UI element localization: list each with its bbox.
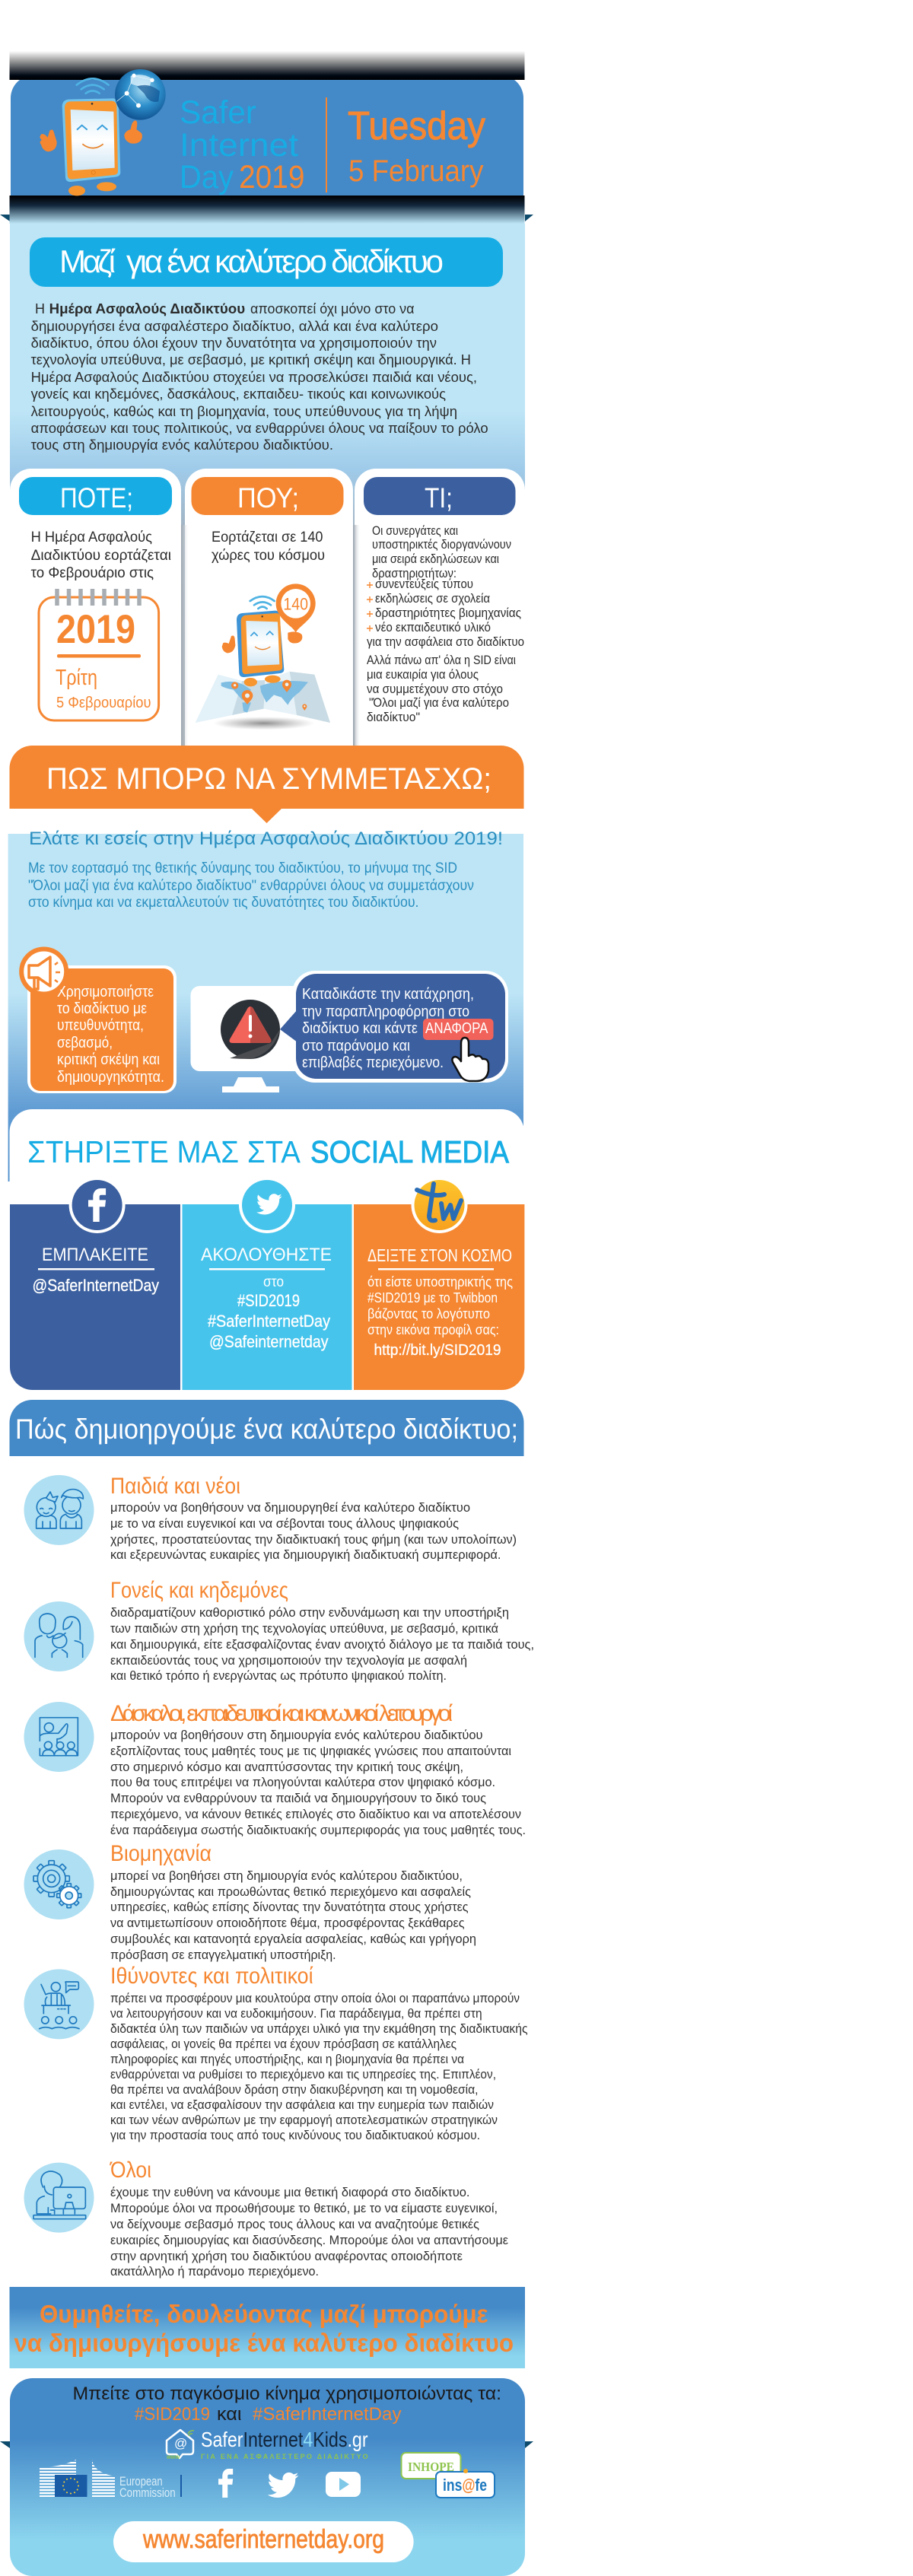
heading: support us on social media: SOCIAL MEDIA [310,1134,510,1169]
banner: how we create a better internet: Πώς δημιοηργούμε ένα καλύτερο διαδίκτυο; [15,1414,518,1445]
text: when description [31,530,171,581]
logo: Safer Internet Day 2019: Day [180,159,234,196]
text: participate description: "Όλοι μαζί για ένα καλύτερο διαδίκτυο" ενθαρρύνει όλους να συμμετάσχουν [28,878,474,894]
text: everyone: Μπορούμε όλοι να προωθήσουμε το θετικό, με το να είμαστε ευγενικοί, [110,2201,498,2215]
text: what description: διαδίκτυο" [367,711,420,724]
intro text block: Η [35,301,45,316]
callout: use the internet responsibly: υπευθυνότητα, [57,1017,144,1034]
text: what description: να συμμετέχουν στο στόχο [367,682,503,696]
heading: ΠΟΤΕ: ΠΟΤΕ; [60,482,133,514]
logo: SaferInternet4Kids: www [166,2454,180,2460]
icon: gears [24,1849,94,1919]
panel: twitter [183,1177,352,1390]
heading: industry: Βιομηχανία [110,1841,212,1866]
icon: parents [24,1601,94,1671]
panel: twibbon: στην εικόνα προφίλ σας: [367,1321,499,1337]
text: what description: για την ασφάλεια στο διαδίκτυο [367,635,524,649]
text: industry: να αντιμετωπίσουν οποιοδήποτε θέμα, προσφέροντας ξεκάθαρες [110,1916,464,1930]
text: decision makers: ενθαρρύνεται να ρυθμίσει το περιεχόμενο και τις υπηρεσίες της. Επιπλέον, [110,2067,496,2081]
panel: footer [10,2378,525,2576]
header top black gradient bar backdrop and blue panel [9,51,525,196]
text: everyone: να δείχνουμε σεβασμό προς τους άλλους και να αναζητούμε θετικές [110,2217,479,2231]
icon: twibbon [411,1177,467,1233]
callout: report illegal content: διαδίκτυο και κάντε [302,1020,418,1037]
text: teachers: που θα τους επιτρέψει να πλοηγούνται καλύτερα στον ψηφιακό κόσμο. [110,1775,495,1789]
text: children [110,1500,517,1562]
text: parents: των παιδιών στη χρήση της τεχνολογίας υπεύθυνα, με σεβασμό, κριτικά [110,1621,498,1636]
panel: twibbon: http://bit.ly/SID2019 [374,1342,501,1359]
text: teachers: περιεχόμενο, να κάνουν θετικές επιλογές στο διαδίκτυο και να αποτελέσουν [110,1807,521,1821]
logo: INHOPE and insafe: INHOPE [408,2460,454,2474]
text: decision makers: θα πρέπει να αναλάβουν δράση στην διακυβέρνηση και τη νομοθεσία, [110,2082,478,2097]
text: parents: εκπαιδεύοντάς τους να χρησιμοποιούν την τεχνολογία με ασφαλή [110,1653,467,1668]
intro text block: λειτουργούς, καθώς και τη βιομηχανία, τους υπεύθυνους για τη λήψη [31,404,457,419]
text: teachers [110,1728,526,1837]
text: decision makers: και εντέλει, να εξασφαλίσουν την ασφάλεια και την ευημερία των παιδιών [110,2097,494,2112]
text: what description: μια ευκαιρία για όλους [367,668,479,682]
logo: SaferInternet4Kids: SaferInternet4Kids.gr [201,2428,368,2451]
logo: European Commission: Commission [119,2485,176,2500]
item: industry [24,1841,476,1962]
panel: twitter: #SaferInternetDay [208,1312,330,1331]
callout: report illegal content: Καταδικάστε την κατάχρηση, [302,986,474,1003]
text: teachers: στο σημερινό κόσμο και αναπτύσσοντας την κριτική τους σκέψη, [110,1760,463,1774]
text: children: χρήστες, προστατεύοντας την διαδικτυακή τους φήμη (και των υπολοίπων) [110,1532,517,1547]
panel: twitter: #SID2019 [237,1291,300,1310]
text: everyone: στην αρνητική χρήση του διαδικτύου αναφέροντας οποιοδήποτε [110,2249,463,2263]
panel: twibbon: ότι είστε υποστηρικτής της [367,1274,513,1290]
icon: calendar 2019: Τρίτη [56,666,97,690]
text: industry: δημιουργώντας και προωθώντας θετικό περιεχόμενο και ασφαλείς [110,1884,471,1899]
banner: remember, working together: να δημιουργήσουμε ένα καλύτερο διαδίκτυο [14,2329,514,2357]
panel: facebook: ΕΜΠΛΑΚΕΙΤΕ [42,1245,148,1265]
ribbon triangles bottom [0,2441,533,2448]
text: industry: συμβουλές και κατανοητά εργαλεία ασφαλείας, καθώς και γρήγορη [110,1932,476,1946]
title pill [30,237,503,287]
panel: what [353,469,525,765]
header lower black gradient bar [9,196,525,224]
icon: mascot on map with 140 pin: 140 [283,595,308,614]
callout: report illegal content: την παραπληροφόρηση στο [302,1003,469,1020]
text: decision makers: διδακτέα ύλη των παιδιών να υπάρχει υλικό για την εκμάθηση της διαδικτυακής [110,2021,528,2036]
text: where description [212,530,325,564]
header date: Tuesday 5 February [326,97,485,192]
heading: ΠΟΥ [192,477,344,515]
banner: how can I participate [9,746,523,823]
text: decision makers: πληροφορίες και πηγές υποστήριξης, και η βιομηχανία θα πρέπει να [110,2052,464,2066]
callout: report illegal content: στο παράνομο και [302,1038,410,1054]
map pins [231,680,307,711]
text: teachers: μπορούν να βοηθήσουν στη δημιουργία ενός καλύτερου διαδικτύου [110,1728,482,1742]
panel: where [181,469,353,765]
heading: support us on social media [27,1134,510,1169]
text: everyone: έχουμε την ευθύνη να κάνουμε μια θετική διαφορά στο διαδίκτυο. [110,2185,470,2199]
heading: parents: Γονείς και κηδεμόνες [110,1578,288,1603]
logo: INHOPE and insafe [402,2453,495,2498]
icon: monitor with warning sign [190,986,304,1092]
intro text block: διαδίκτυο, όπου όλοι έχουν την δυνατότητα να χρησιμοποιούν την [31,336,437,351]
text: when description: Η Ημέρα Ασφαλούς [31,530,152,545]
text: what description: Αλλά πάνω απ' όλα η SID είναι [367,654,516,667]
text: everyone: ακατάλληλο ή παράνομο περιεχόμενο. [110,2264,319,2279]
callout: use the internet responsibly: δημιουργηκότητα. [57,1069,164,1086]
text: what description: δραστηριότητες βιομηχανίας [375,606,521,620]
heading: ΠΟΥ: ΠΟΥ; [237,482,299,514]
text: what description: εκδηλώσεις σε σχολεία [375,592,490,606]
text: industry: μπορεί να βοηθήσει στη δημιουργία ενός καλύτερου διαδικτύου, [110,1868,463,1883]
heading: participate invitation: Ελάτε κι εσείς στην Ημέρα Ασφαλούς Διαδικτύου 2019! [29,828,503,849]
panel: twibbon: ΔΕΙΞΤΕ ΣΤΟΝ ΚΟΣΜΟ [367,1245,512,1265]
text: join the global movement [73,2384,501,2425]
text: parents: και δημιουργικά, είτε εξασφαλίζοντας έναν ανοιχτό διάλογο με τα παιδιά τους, [110,1637,534,1652]
panel: social media white card [9,1109,524,1204]
logo: European Commission [40,2460,182,2500]
text: industry [110,1868,476,1962]
callout: use the internet responsibly: κριτική σκέψη και [57,1051,160,1068]
panel: facebook [10,1177,180,1390]
item: teachers and social workers [24,1701,526,1837]
callout: use the internet responsibly: το διαδίκτυο με [57,1000,147,1017]
icon: children [24,1475,94,1545]
header date: Tuesday 5 February: Tuesday [348,104,485,148]
text: what description: συνεντεύξεις τύπου [375,577,473,591]
callout: report illegal content [280,971,508,1083]
panel: participate background [8,834,523,1181]
callout: report illegal content: επιβλαβές περιεχόμενο. [302,1054,444,1071]
intro text block: αποφάσεων και τους πολιτικούς, να ενθαρρύνει όλους να παίξουν το ρόλο [31,421,488,436]
icon: speaker [24,1969,94,2039]
text: join the global movement: #SID2019 [135,2404,210,2425]
icon: teacher [24,1702,94,1772]
icon: calendar 2019: 2019 [56,607,135,652]
logo: SaferInternet4Kids: @ [174,2436,187,2450]
text: what description: μια σειρά εκδηλώσεων και [372,552,499,566]
text: children: και εξερευνώντας ευκαιρίες για δημιουργική διαδικτυακή συμπεριφορά. [110,1547,501,1562]
logo: Safer Internet Day 2019 [180,94,304,196]
heading: ΤΙ [364,477,516,515]
heading: teachers: Δάσκαλοι, εκπαιδευτικοί και κοινωνικοί λειτουργοί [110,1701,453,1726]
icon: calendar 2019 [39,589,159,720]
icon: mascot on map with 140 pin [196,584,330,730]
text: decision makers: πρέπει να προσφέρουν μια κουλτούρα στην οποία όλοι οι παραπάνω μπορούν [110,1991,520,2005]
text: participate description: Με τον εορτασμό της θετικής δύναμης του διαδικτύου, το μήνυμα της SID [28,860,457,876]
text: what description: "Όλοι μαζί για ένα καλύτερο [369,696,509,710]
button: website [113,2521,414,2562]
logo: SaferInternet4Kids [166,2428,368,2460]
panel: twitter: @Safeinternetday [209,1332,329,1351]
text: teachers: ένα παράδειγμα σωστής διαδικτυακής συμπεριφοράς για τους μαθητές τους. [110,1823,526,1837]
text: industry: υπηρεσίες, καθώς επίσης δίνοντας την δυνατότητα στους χρήστες [110,1900,469,1914]
panel: facebook: @SaferInternetDay [32,1276,159,1295]
text: join the global movement: Μπείτε στο παγκόσμιο κίνημα χρησιμοποιώντας τα: [73,2384,501,2404]
heading: ΤΙ: ΤΙ; [425,482,453,514]
text: teachers: εξοπλίζοντας τους μαθητές τους με τις ψηφιακές γνώσεις που απαιτούνται [110,1744,511,1758]
intro text block: Ημέρα Ασφαλούς Διαδικτύου στοχεύει να προσελκύσει παιδιά και νέους, [31,370,477,385]
heading: children: Παιδιά και νέοι [110,1474,240,1499]
text: join the global movement: #SaferInternetDay [253,2404,402,2425]
icon: facebook [69,1177,126,1233]
text: children: μπορούν να βοηθήσουν να δημιουργηθεί ένα καλύτερο διαδίκτυο [110,1500,470,1515]
heading: support us on social media: ΣΤΗΡΙΞΤΕ ΜΑΣ ΣΤΑ [27,1134,301,1169]
banner: how we create a better internet [9,1400,523,1456]
logo: Safer Internet Day 2019: Internet [180,127,298,164]
icon: mascot phone with globe [40,69,166,196]
icon: hand cursor [452,1038,488,1081]
intro panel background [10,224,525,746]
text: what description: Οι συνεργάτες και [372,524,458,538]
panel: twibbon: #SID2019 με το Twibbon [367,1290,498,1305]
logo: European Commission: European [119,2474,163,2489]
text: teachers: Μπορούν να ενθαρρύνουν τα παιδιά να δημιουργήσουν το δικό τους [110,1791,486,1805]
title pill: Μαζί [59,243,116,279]
text: where description: χώρες του κόσμου [212,548,325,564]
text: join the global movement: και [217,2404,242,2425]
heading: decision makers: Ιθύνοντες και πολιτικοί [110,1964,313,1989]
text: decision makers: να λειτουργήσουν και να ευδοκιμήσουν. Για παράδειγμα, θα πρέπει στη [110,2006,482,2021]
panel: twibbon [354,1177,524,1390]
text: everyone: ευκαιρίες δημιουργίας και διασύνδεσης. Μπορούμε όλοι να απαντήσουμε [110,2233,508,2247]
intro text block: γονείς και κηδεμόνες, δασκάλους, εκπαιδευ- τικούς και κοινωνικούς [31,386,446,402]
item: everyone [24,2158,508,2279]
panel: twibbon: βάζοντας το λογότυπο [367,1305,490,1321]
logo: INHOPE and insafe: ins@fe [443,2476,487,2495]
text: what description [367,524,524,724]
text: decision makers: και των νέων ανθρώπων με την εφαρμογή αποτελεσματικών στρατηγικών [110,2113,498,2127]
intro text block: Ημέρα Ασφαλούς Διαδικτύου [49,301,245,316]
item: parents and guardians [24,1578,534,1683]
text: parents: διαδραματίζουν καθοριστικό ρόλο στην ενδυνάμωση και την υποστήριξη [110,1605,509,1620]
intro text block: τεχνολογία υπεύθυνα, με σεβασμό, με κριτική σκέψη και δημιουργικά. Η [31,352,471,367]
icon: twitter [239,1177,295,1233]
text: where description: Εορτάζεται σε 140 [212,530,323,545]
banner: how can I participate: ΠΩΣ ΜΠΟΡΩ ΝΑ ΣΥΜΜΕΤΑΣΧΩ; [46,762,491,796]
callout: use the internet responsibly: σεβασμό, [57,1035,113,1051]
text: parents [110,1605,534,1683]
icon: person at computer [24,2163,94,2233]
intro text block: δημιουργήσει ένα ασφαλέστερο διαδίκτυο, αλλά και ένα καλύτερο [31,319,438,334]
text: everyone [110,2185,508,2279]
callout: use the internet responsibly: Χρησιμοποιήστε [57,984,154,1000]
intro text block: τους στη δημιουργία ενός καλύτερου διαδικτύου. [31,437,333,453]
text: what description: υποστηρικτές διοργανώνουν [372,538,511,552]
button: report: ΑΝΑΦΟΡΑ [425,1020,488,1037]
logo: Safer Internet Day 2019: Safer [180,94,256,131]
text: industry: πρόσβαση σε επαγγελματική υποστήριξη. [110,1948,336,1962]
intro text block: αποσκοπεί όχι μόνο στο να [250,301,414,316]
callout: use the internet responsibly [21,949,177,1093]
icon: calendar 2019: 5 Φεβρουαρίου [56,695,151,711]
heading: ΠΟΤΕ [19,477,172,515]
icon: megaphone [21,949,66,994]
text: participate description [28,860,474,911]
text: decision makers [110,1991,528,2142]
logo: Safer Internet Day 2019: 2019 [239,159,304,196]
text: when description: Διαδικτύου εορτάζεται [31,548,171,564]
banner: remember, working together [9,2287,525,2368]
text: children: με το να είναι ευγενικοί και να σέβονται τους άλλους ψηφιακούς [110,1516,459,1531]
text: what description: δραστηριοτήτων: [372,567,456,580]
icons: footer social media [218,2469,361,2498]
intro text block [31,301,488,453]
ribbon triangles top [0,215,533,221]
text: parents: και θετικό τρόπο ή ενεργώντας ως πρότυπο ψηφιακού πολίτη. [110,1668,447,1683]
logo: SaferInternet4Kids: ΓΙΑ ΕΝΑ ΑΣΦΑΛΕΣΤΕΡΟ ΔΙΑΔΙΚΤΥΟ [201,2453,368,2460]
item: decision makers and politicians [24,1964,528,2142]
panel: twitter: στο [263,1274,284,1290]
text: decision makers: ασφάλειας, οι γονείς θα πρέπει να έχουν πρόσβαση σε κατάλληλες [110,2037,456,2051]
heading: everyone: Όλοι [109,2158,151,2183]
text: what description: νέο εκπαιδευτικό υλικό [375,621,491,634]
panel: when [10,469,181,765]
text: when description: το Φεβρουάριο στις [31,565,154,581]
header date: Tuesday 5 February: 5 February [348,154,484,188]
text: participate description: στο κίνημα και να εκμεταλλευτούν τις δυνατότητες του διαδικτύου. [28,895,418,911]
title pill: για ένα καλύτερο διαδίκτυο [126,243,444,279]
panel: twitter: ΑΚΟΛΟΥΘΗΣΤΕ [201,1245,332,1265]
item: children and youth [24,1474,517,1562]
banner: remember, working together: Θυμηθείτε, δουλεύοντας μαζί μπορούμε [40,2300,488,2328]
button: website: www.saferinternetday.org [142,2525,384,2554]
text: decision makers: για την προστασία τους από τους κινδύνους του διαδικτυακού κόσμου. [110,2128,480,2142]
